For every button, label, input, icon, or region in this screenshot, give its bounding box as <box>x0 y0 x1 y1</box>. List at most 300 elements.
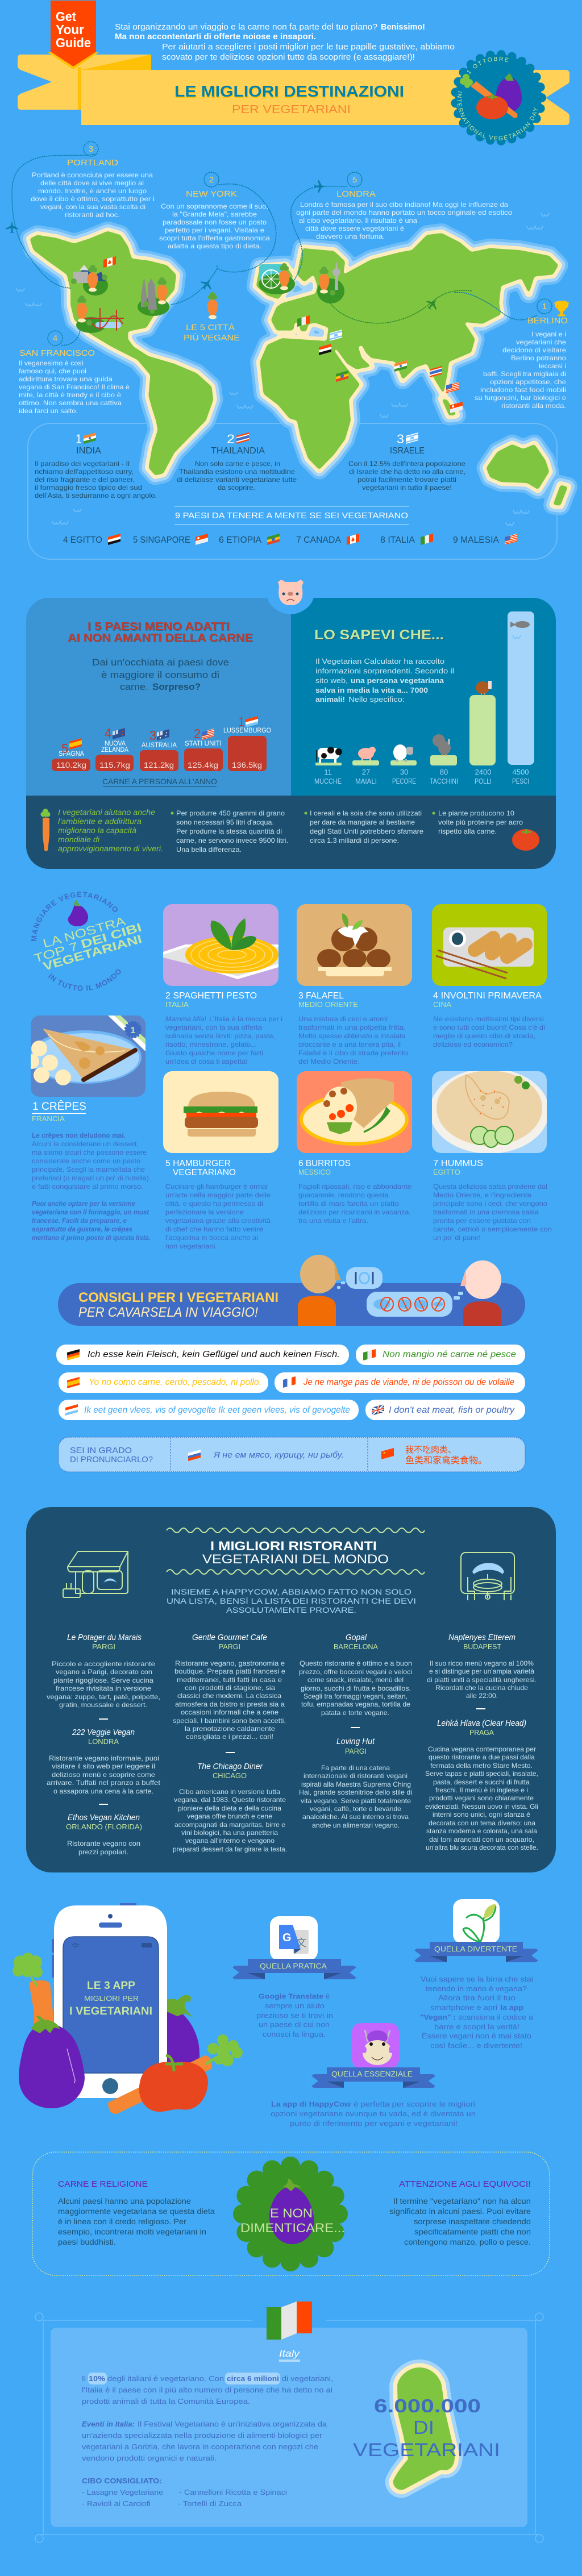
food card text: crepes <box>32 1100 151 1242</box>
column: napfenyes: e si distingue per un'ampia varietà <box>429 1667 534 1675</box>
text: religion: paesi buddhisti. <box>58 2237 116 2246</box>
icon: carrot and tomato right <box>108 2034 243 2114</box>
label: DI PRONUNCIARLO? <box>70 1455 153 1464</box>
city: san francisco: idea farci un salto. <box>19 407 78 415</box>
chart: animals saved: PECORE <box>392 777 416 785</box>
column: gopal: vita vegano. Serve piatti totalmente <box>301 1797 411 1805</box>
app: google translate: 文 <box>296 1937 306 1949</box>
country row: 9 MALESIA <box>453 535 499 545</box>
food card text: spaghetti: Mamma Mia! <box>165 1015 207 1023</box>
heading: 9 paesi: 9 PAESI DA TENERE A MENTE SE SEI VEGETARIANO <box>175 511 408 521</box>
food card text: crepes: francese. Facili da preparare, e <box>32 1217 127 1225</box>
food card text: hummus: Medio Oriente, e l'ingrediente <box>433 1191 531 1199</box>
bar chart: meat per person: 4 <box>105 726 111 740</box>
food card text: hamburger: 5 HAMBURGER <box>165 1159 231 1168</box>
city: san francisco: vegana di San Francisco! Il clima è <box>19 383 130 391</box>
food card text: involtini: meglio di questo cibo di strada, <box>433 1032 535 1040</box>
right half background <box>291 598 556 796</box>
phrase: russian: Я не ем мясо, курицу, ни рыбу. <box>213 1450 344 1460</box>
food card text: hamburger: perfezionare la versione <box>165 1208 244 1216</box>
column: gentle gourmet: occasioni informali che a cene <box>181 1708 278 1716</box>
plane green <box>424 296 441 313</box>
highlights <box>88 2373 280 2384</box>
column: gentle gourmet: mediterranei, tutti fatti in casa e <box>177 1676 282 1684</box>
green claim: migliorano la capacità <box>58 826 136 835</box>
country: israele: ISRAELE <box>390 446 425 456</box>
label: SEI IN GRADO <box>70 1446 132 1455</box>
column: le potager: gratin, moussake e dessert. <box>59 1701 147 1709</box>
text: vegan app: tenendo in mano è vegana? <box>426 1984 527 1993</box>
country row <box>63 534 517 545</box>
city: portland: PORTLAND <box>67 158 118 168</box>
food card text: hamburger: l'acquolina in bocca anche ai <box>165 1234 258 1242</box>
food card: hummus <box>430 1068 549 1154</box>
ribbon: quella essenziale <box>311 2067 435 2088</box>
world map <box>6 142 568 559</box>
icon: carrot <box>41 809 50 851</box>
column: napfenyes: Cucina vegana contemporanea per <box>428 1745 536 1753</box>
food card text: spaghetti: 2 SPAGHETTI PESTO <box>165 991 257 1001</box>
stat: 6 million <box>353 2395 500 2460</box>
top cities panel outline <box>28 423 557 559</box>
text: italy facts: prodotti animali di tutta la Comunità Europea. <box>82 2397 250 2406</box>
fact: proteins: rispetto alla carne. <box>438 827 497 835</box>
column: gentle gourmet: vini biologici, ha una panetteria <box>181 1829 278 1837</box>
bar chart: meat per person: ZELANDA <box>101 746 128 754</box>
subtitle: PER VEGETARIANI <box>232 103 351 116</box>
column: napfenyes: Ricordati che la cucina chiude <box>435 1684 528 1692</box>
city: berlino: vegetariani che <box>516 338 566 346</box>
city: new york: Con un soprannome come il suo, <box>161 202 268 210</box>
column: napfenyes: Il suo ricco menù vegano al 100% <box>430 1659 534 1667</box>
heading: lo sapevi che: LO SAPEVI CHE... <box>314 627 444 643</box>
country: india <box>35 432 157 500</box>
city: san francisco <box>19 348 130 415</box>
heading rotated: LA NOSTRA <box>41 914 127 951</box>
country: india: dell'Asia, ti sedurranno a ogni angolo. <box>35 492 157 500</box>
fact: water: sono necessari 95 litri d'acqua. <box>176 818 274 826</box>
phone screen title: LE 3 APP <box>87 1980 135 1992</box>
inner panel <box>51 2328 527 2527</box>
food card text: falafel: Falafel è il cibo di strada preferito <box>298 1049 408 1057</box>
phrase: spanish <box>59 1372 268 1393</box>
city: berlino: leccarsi i <box>539 362 566 370</box>
header banner <box>18 1 569 145</box>
city: londra <box>296 189 512 240</box>
city: berlino: baffi. Scegli tra migliaia di <box>483 370 566 378</box>
heading: carne e religione: CARNE E RELIGIONE <box>58 2179 148 2189</box>
column: gentle gourmet: pioniere della dieta e della cucina <box>178 1804 281 1812</box>
column: napfenyes: stanza moderna e colorata, una sala <box>426 1827 537 1835</box>
land beach <box>30 231 568 506</box>
food card text: crepes: Le crêpes non deludono mai. <box>32 1131 126 1139</box>
text: vegan app: così facile... e divertente! <box>430 2041 522 2050</box>
column: gentle gourmet: Ristorante vegano, gastronomia e <box>175 1659 285 1667</box>
food card text: hamburger: non vegetariani. <box>165 1242 217 1250</box>
icon: sheep <box>393 744 413 762</box>
city: san francisco: Il veganesimo è così <box>19 359 84 367</box>
text: google translate: Google Translate <box>259 1992 323 2000</box>
chart: animals saved: 30 <box>400 768 408 776</box>
column: le potager: ORLANDO (FLORIDA) <box>66 1822 142 1831</box>
city: berlino: opzioni appetitose, che <box>490 378 566 386</box>
column: gopal: ispirati alla Maestra Suprema Ching <box>301 1780 411 1788</box>
text: events: un'azienda specializzata nella produzione di alimenti biologici per <box>82 2431 323 2440</box>
city: san francisco: famoso qui, che puoi <box>19 367 86 375</box>
restaurants panel <box>26 1507 556 1872</box>
city: londra: al cibo vegetariano. Il risultato è una <box>299 217 417 224</box>
intro: UNA LISTA, BENSÌ LA LISTA DEI RISTORANTI CHE DEVI <box>167 1596 416 1605</box>
food card text: hamburger: vegetariana grazie alla creatività <box>165 1217 271 1225</box>
left half background <box>26 598 291 796</box>
icon: chicken <box>476 681 492 696</box>
Get Your Guide bookmark logo: Guide <box>56 35 91 50</box>
bar chart: meat per person <box>52 714 271 771</box>
column: napfenyes: BUDAPEST <box>463 1642 501 1651</box>
food card text: crepes: vegetariana con il formaggio, un must <box>32 1208 149 1216</box>
city: berlino: su furgoncini, bar biologici e <box>475 394 566 402</box>
city: new york: paradossale non fosse un posto <box>163 218 267 226</box>
heading: consigli: CONSIGLI PER I VEGETARIANI <box>78 1290 278 1305</box>
text: vegan app: barre e scopri la verità! <box>434 2022 519 2031</box>
text: vegan app: "Vegan" : <box>420 2013 456 2021</box>
column: le potager: Ristorante vegano informale, puoi <box>49 1754 159 1762</box>
text block: vegetarian calculator: Nello specifico: <box>348 695 405 704</box>
pronunciation panel <box>59 1437 525 1472</box>
bar chart: meat per person: 115.7kg <box>99 760 130 769</box>
text: happycow: opzioni vegetariane ovunque tu vada, ed è diventata un <box>271 2109 476 2118</box>
intro: ASSOLUTAMENTE PROVARE. <box>226 1605 356 1614</box>
heading: italy <box>279 2348 301 2361</box>
country: thailandia: di deliziose varianti vegetariane tutte <box>177 476 297 484</box>
food card text: hummus: EGITTO <box>433 1168 460 1176</box>
phrases <box>56 1345 525 1420</box>
column: napfenyes: dai toni aranciati con un acquario, <box>429 1836 534 1843</box>
text: vegan app: Vuoi sapere se la birra che stai <box>421 1975 533 1983</box>
icon: shop <box>63 1551 128 1597</box>
intro text: Ma non accontentarti di offerte noiose e insapori. <box>115 32 316 41</box>
column: le potager: delizioso menù e scoprire come <box>52 1771 155 1779</box>
column: gopal: Hai, grande sostenitrice dello stile di <box>299 1788 412 1796</box>
icon: pig <box>358 747 376 760</box>
column: gopal: tofu, empanadas vegana, tortilla de <box>301 1700 410 1708</box>
column: le potager: francese rivisitata in versione <box>56 1684 151 1692</box>
food card text: involtini <box>433 991 545 1048</box>
column: gopal: giorno, succhi di frutta e bocadillos. <box>301 1684 411 1692</box>
heading: 5 paesi: I 5 PAESI MENO ADATTI <box>88 621 230 633</box>
person right <box>460 1260 501 1326</box>
green claim: approvvigionamento di viveri. <box>58 844 163 853</box>
column: napfenyes: prodotti vegani sono chiaramente <box>429 1794 534 1802</box>
apps section <box>13 1899 538 2128</box>
badge: international vegetarian day <box>451 50 546 145</box>
country row: 8 ITALIA <box>380 535 415 545</box>
phone <box>52 1903 167 2098</box>
heading rotated: TOP 7 <box>32 940 80 966</box>
column: gopal: patata e torte vegane. <box>321 1709 389 1717</box>
scroll frame <box>35 2313 543 2542</box>
food card text: crepes: soprattutto da gustare, le crêpes <box>32 1225 132 1233</box>
text: misunderstandings: sorprese inaspettate chiedendo <box>414 2217 531 2226</box>
food card: hamburger <box>163 1071 278 1153</box>
icon: new york landmark <box>138 277 169 316</box>
phrase: chinese: 鱼类和家禽类食物。 <box>405 1455 487 1466</box>
green claim: l'ambiente e addirittura <box>58 817 142 826</box>
food card text: hamburger: Cucinare gli hamburger è ormai <box>165 1183 268 1191</box>
column: le potager <box>47 1633 161 1856</box>
country: india: il formaggio fresco tipico del sud <box>35 484 142 492</box>
fact: cereals: I cereali e la soia che sono utilizzati <box>310 809 422 817</box>
food card: spaghetti <box>163 904 278 986</box>
food card text: crepes: ma siamo sicuri che possono essere <box>32 1148 147 1156</box>
fact: water <box>171 809 288 854</box>
label: le 5 citta: PIÙ VEGANE <box>184 333 240 343</box>
food card text: involtini: delizioso ed economico? <box>433 1041 513 1048</box>
main title: LE MIGLIORI DESTINAZIONI <box>174 82 404 100</box>
heading: VEGETARIANI DEL MONDO <box>202 1552 389 1566</box>
city: londra: città dove essere vegetariani è <box>305 224 404 232</box>
text: misunderstandings: contengono manzo, pollo o pesce. <box>404 2237 531 2246</box>
text: events: vendono prodotti organici e naturali. <box>82 2454 217 2462</box>
column: gentle gourmet: atmosfera da bistro si presta sia a <box>175 1700 285 1708</box>
fact: proteins: volte più proteine per acro <box>438 818 523 826</box>
country: thailandia <box>177 432 297 492</box>
column: napfenyes: Napfenyes Etterem <box>448 1633 516 1642</box>
column: gentle gourmet: Gentle Gourmet Cafe <box>192 1633 267 1642</box>
text: google translate: sempre un aiuto <box>265 2001 325 2010</box>
top countries panel <box>35 432 517 545</box>
route numbers: 1 <box>542 302 547 311</box>
text: events: Il Festival Vegetariano è un'iniziativa organizzata da <box>138 2420 327 2428</box>
text block: vegetarian calculator: animali! <box>315 695 345 704</box>
route numbers: 3 <box>89 144 93 154</box>
text: religion <box>58 2196 215 2246</box>
heading: I MIGLIORI RISTORANTI <box>210 1539 377 1553</box>
text: google translate: prezioso se ti trovi in <box>256 2011 333 2020</box>
food card text: falafel: Molto spesso abbinato a insalata <box>298 1032 406 1040</box>
subheading: PER CAVARSELA IN VIAGGIO! <box>78 1305 258 1320</box>
column: gopal: anche un alimentari vegano. <box>312 1821 400 1829</box>
bar chart: meat per person: LUSSEMBURGO <box>223 726 271 734</box>
chart: animals saved: 4500 <box>513 768 529 776</box>
text: vegan app: smartphone e apri <box>430 2003 497 2012</box>
food card text: involtini: e sono tutti così buoni! Cosa c'è di <box>433 1023 545 1031</box>
food card text: hummus: Questa deliziosa salsa proviene dal <box>433 1183 547 1191</box>
fact: cereals: degli Stati Uniti potrebbero sfamare <box>310 827 423 835</box>
icon: berlin landmark <box>317 263 344 303</box>
column: le potager: vegano a Parigi, decorato con <box>56 1668 152 1676</box>
panel: meat countries and did you know <box>26 580 556 869</box>
column: le potager: vegana: zuppe, tart, paté, polpette, <box>47 1693 160 1701</box>
badge: e non dimenticare: E NON <box>270 2206 313 2220</box>
column: le potager: Ristorante vegano con <box>67 1840 140 1847</box>
country: thailandia: THAILANDIA <box>211 446 265 456</box>
badge: e non dimenticare: DIMENTICARE... <box>240 2221 345 2235</box>
reminder panel <box>32 2152 550 2275</box>
text: events: Eventi in Italia: <box>82 2420 135 2428</box>
intro <box>167 1587 416 1614</box>
text: google translate: un paese di cui non <box>259 2020 330 2029</box>
food section title <box>31 892 143 991</box>
thought bubble: plate <box>337 1267 383 1289</box>
food card text: burritos: tra una visita e l'altra. <box>298 1217 368 1225</box>
city: san francisco: ottimo. Non sembra una cattiva <box>19 399 122 407</box>
food card text: falafel: Una mistura di ceci e aromi <box>298 1015 388 1023</box>
column: gentle gourmet <box>173 1633 287 1853</box>
column: le potager: Ethos Vegan Kitchen <box>68 1813 140 1822</box>
icon: san francisco landmark <box>76 296 124 333</box>
route numbers <box>53 144 547 343</box>
route numbers: 2 <box>209 175 214 185</box>
rosette: number one: 1 <box>131 1026 136 1035</box>
food card text: hummus: trasformati in una cremosa salsa <box>433 1208 539 1216</box>
route numbers: 5 <box>352 175 357 185</box>
column: le potager: Piccolo e accogliente ristorante <box>52 1660 155 1668</box>
heading rotated <box>32 914 143 973</box>
country row: 4 EGITTO <box>63 535 102 545</box>
column: gentle gourmet: vegana, dal 1983. Questo ristorante <box>174 1796 286 1804</box>
phrase: chinese: 我不吃肉类、 <box>405 1445 456 1455</box>
country: israele: 3 <box>397 432 404 446</box>
sea waves <box>16 213 549 525</box>
heading: 5 paesi <box>68 621 253 644</box>
country row: 6 ETIOPIA <box>219 535 261 545</box>
column: le potager: visitare il sito web per leggere il <box>52 1762 155 1770</box>
icon: turkey <box>433 734 451 756</box>
phrase: dutch <box>59 1400 359 1420</box>
intro text: Stai organizzando un viaggio e la carne non fa parte del tuo piano? <box>115 22 377 32</box>
column: le potager: piante rigogliose. Serve cucina <box>53 1676 153 1684</box>
column: gopal: Questo ristorante è ottimo e a buon <box>300 1659 412 1667</box>
route berlin green <box>329 290 472 323</box>
country: india: 1 <box>76 432 82 446</box>
text: events: vegetariani a Gorizia, che lavora in cooperazione con negozi che <box>82 2442 318 2451</box>
chart: animals saved: MAIALI <box>355 777 377 785</box>
green claim: mondiale di <box>58 835 100 844</box>
app: happycow <box>311 2023 435 2088</box>
text: italy facts <box>82 2374 333 2406</box>
column: napfenyes: questo ristorante a due passi dalla <box>429 1753 535 1761</box>
column: gopal: internazionale di ristoranti vegani <box>304 1772 408 1780</box>
city: berlino: I vegani e i <box>531 330 566 338</box>
bottom band content <box>41 808 539 854</box>
country: israele: Con il 12.5% dell'intera popolazione <box>348 460 465 468</box>
text: happycow: è perfetta per scoprire le migliori <box>354 2100 475 2108</box>
food card text: burritos: Fagioli ripassati, riso e abbondante <box>298 1183 411 1191</box>
column: gentle gourmet: speciali. I bambini sono ben accetti, <box>173 1717 286 1725</box>
phrase: english: I don't eat meat, fish or poultry <box>389 1405 515 1415</box>
text: misunderstandings <box>389 2196 531 2246</box>
city: portland: delle città dove si vive meglio al <box>40 179 144 187</box>
country: thailandia: Non solo carne e pesce, in <box>195 460 280 468</box>
carrot centre <box>207 292 218 319</box>
bar chart: meat per person: 2 <box>194 726 201 741</box>
column: napfenyes: interni sono unici, ogni stanza è <box>433 1811 530 1818</box>
column: gentle gourmet: boutique. Prepara piatti francesi e <box>174 1667 285 1675</box>
city: new york: adatta a questa tipo di dieta. <box>168 242 261 250</box>
phrase: english <box>365 1400 525 1420</box>
fact: proteins <box>432 809 523 835</box>
food card: burritos <box>297 1071 412 1153</box>
column: le potager: 222 Veggie Vegan <box>72 1728 135 1737</box>
column: gentle gourmet: consigliata e i prezzi... cari! <box>186 1733 273 1741</box>
text block: dai un'occhiata: è maggiore il consumo di <box>101 669 219 680</box>
city: londra: ogni parte del mondo hanno portato un tocco originale ed esotico <box>296 209 512 217</box>
food card text: crepes: Alcuni le considerano un dessert, <box>32 1140 139 1148</box>
food card text: involtini: 4 INVOLTINI PRIMAVERA <box>433 991 542 1001</box>
intro: INSIEME A HAPPYCOW, ABBIAMO FATTO NON SOLO <box>171 1587 411 1596</box>
text: recommended food <box>82 2477 287 2508</box>
text: italy facts: degli italiani è vegetariano. Con <box>107 2374 224 2383</box>
country row: 7 CANADA <box>296 535 341 545</box>
column: gopal: come snack, insalate, menù del <box>307 1676 404 1684</box>
route 3 portland <box>12 142 552 346</box>
fact: proteins: Le piante producono 10 <box>438 809 514 817</box>
Get Your Guide bookmark logo: Your <box>56 22 84 37</box>
icon: broccoli and carrot left <box>13 1953 54 2029</box>
country: israele: vegetariani in tutto il paese! <box>362 484 452 492</box>
food card text: hamburger: di chef che hanno fatto venire <box>165 1225 263 1233</box>
food card text: hummus: 7 HUMMUS <box>433 1159 483 1168</box>
text: recommended food: - Tortelli di Zucca <box>178 2499 242 2508</box>
column: gentle gourmet: la prenotazione caldamente <box>185 1725 275 1733</box>
fact: water: Una bella differenza. <box>176 846 242 854</box>
food card text: falafel <box>298 991 408 1066</box>
text: italy facts: circa 6 milioni <box>227 2374 279 2383</box>
column: napfenyes: di piatti uniti a specialità ungheresi. <box>427 1676 537 1684</box>
text: misunderstandings: Il termine "vegetariano" non ha alcun <box>393 2196 531 2205</box>
icon: restaurant table <box>461 1553 514 1600</box>
column: napfenyes: Lehká Hlava (Clear Head) <box>437 1718 526 1728</box>
app: google translate: QUELLA PRATICA <box>260 1962 327 1970</box>
column: le potager: o assapora una cena à la carte. <box>53 1787 153 1795</box>
bar chart: meat per person: STATI UNITI <box>185 739 222 747</box>
city: portland: vegani, con la sua vasta scelta di <box>40 203 146 211</box>
food card text: crepes: meritano il primo posto di questa lista. <box>32 1234 151 1242</box>
column: gopal: BARCELONA <box>334 1642 378 1651</box>
food card text: spaghetti: risotto, minestrone, gelato... <box>165 1041 257 1048</box>
bar chart: meat per person: 136.5kg <box>232 760 262 769</box>
label: le 5 citta: LE 5 CITTÀ <box>186 323 235 332</box>
text: vegan app: la app <box>500 2003 523 2012</box>
notch <box>267 597 314 614</box>
city: new york <box>159 189 270 250</box>
bottom band <box>26 796 556 869</box>
text block: vegetarian calculator: sito web, <box>315 676 348 685</box>
city: san francisco: addirittura trovare una guida <box>19 375 113 383</box>
column: gopal: prezzo, offre bocconi vegani e veloci <box>299 1668 412 1676</box>
bar chart: meat per person: AUSTRALIA <box>142 741 177 749</box>
fact: cereals: per dare da mangiare al bestiame <box>310 818 415 826</box>
column: le potager: prezzi popolari. <box>78 1848 128 1856</box>
phone screen title: I VEGETARIANI <box>69 2005 152 2017</box>
intro text <box>115 22 455 62</box>
circular text bottom: IN TUTTO IL MONDO <box>48 969 120 991</box>
food card text: spaghetti: un'idea di cosa ti aspetta! <box>165 1058 248 1066</box>
badge: international vegetarian day: INTERNATIONAL VEGETARIAN DAY <box>457 91 538 140</box>
phone veggies behind <box>34 1980 199 2071</box>
person left <box>298 1255 341 1326</box>
phrase: french <box>275 1372 525 1393</box>
column: napfenyes: PRAGA <box>469 1728 494 1737</box>
app: vegan <box>414 1899 538 1962</box>
bar chart: meat per person: 110.2kg <box>56 760 86 769</box>
heading <box>202 1539 389 1566</box>
column: le potager: LONDRA <box>88 1737 119 1746</box>
app: vegan: QUELLA DIVERTENTE <box>434 1945 517 1953</box>
column: le potager: PARGI <box>92 1642 115 1651</box>
food card: crepes <box>24 1016 146 1097</box>
